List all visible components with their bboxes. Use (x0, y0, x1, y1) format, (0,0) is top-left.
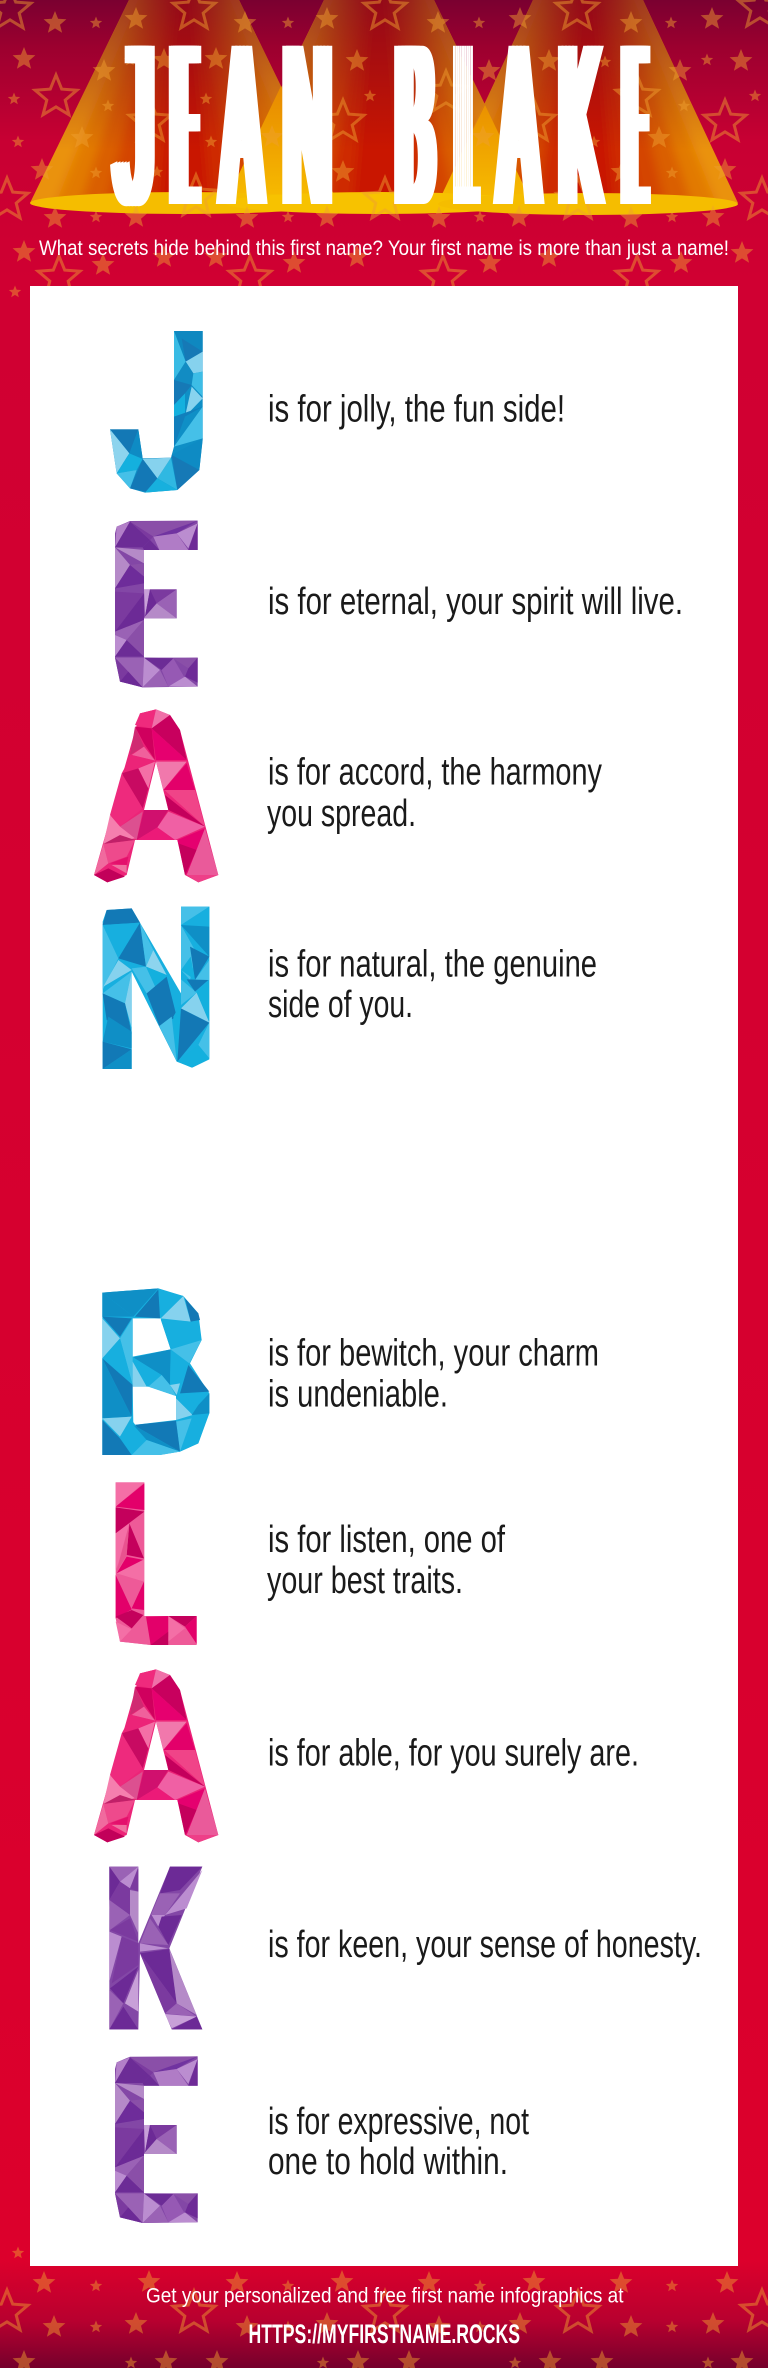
footer url: HTTPS://MYFIRSTNAME.ROCKS (248, 2319, 520, 2349)
row: E (115, 521, 683, 687)
text: A meaning (267, 751, 602, 835)
title: A (223, 0, 261, 253)
icon: letter E (115, 521, 198, 687)
title: J (114, 0, 154, 253)
title: L (460, 0, 473, 253)
row: J (110, 331, 565, 493)
star pattern: bottom (0, 2246, 768, 2368)
icon: letter A (94, 709, 218, 882)
text: N meaning: side of you. (268, 984, 413, 1026)
text: N meaning: is for natural, the genuine (268, 944, 597, 986)
text: E second meaning: one to hold within. (268, 2141, 508, 2183)
row: L (116, 1482, 505, 1645)
icon: letter E second (115, 2056, 198, 2223)
star pattern: top (0, 0, 768, 297)
text: B meaning: is undeniable. (268, 1374, 448, 1416)
text: A meaning: is for accord, the harmony (268, 751, 602, 793)
icon: letter A second (94, 1669, 218, 1842)
panel: white content card (30, 286, 738, 2266)
text: E second meaning (268, 2101, 529, 2183)
title: E (175, 0, 195, 253)
title: B (397, 0, 433, 253)
row: A (second) (94, 1669, 639, 1842)
row: E (second) (115, 2056, 529, 2223)
icon: letter L (116, 1482, 197, 1645)
title: N (284, 0, 331, 253)
title: E (626, 0, 644, 253)
footer tagline: Get your personalized and free first name infographics at (146, 2285, 624, 2308)
title (110, 0, 651, 253)
text: A meaning: you spread. (267, 793, 416, 835)
text: B meaning (268, 1333, 599, 1416)
text: A second meaning: is for able, for you surely are. (268, 1733, 639, 1775)
icon: letter N (103, 907, 209, 1069)
text: E second meaning: is for expressive, not (268, 2101, 529, 2143)
row: A (94, 709, 602, 882)
text: B meaning: is for bewitch, your charm (268, 1333, 599, 1375)
text: N meaning (268, 944, 597, 1026)
text: L meaning: is for listen, one of (268, 1519, 505, 1561)
icon: letter J (110, 331, 203, 493)
row: K (109, 1867, 702, 2029)
icon: letter B (102, 1288, 209, 1455)
row: N (103, 907, 597, 1069)
title: A (500, 0, 538, 253)
text: L meaning (267, 1519, 505, 1602)
spotlights (30, 0, 738, 215)
row: B (102, 1288, 599, 1455)
text: J meaning: is for jolly, the fun side! (268, 389, 565, 431)
icon: letter K (109, 1867, 202, 2029)
title: K (560, 0, 600, 253)
text: L meaning: your best traits. (267, 1560, 463, 1602)
